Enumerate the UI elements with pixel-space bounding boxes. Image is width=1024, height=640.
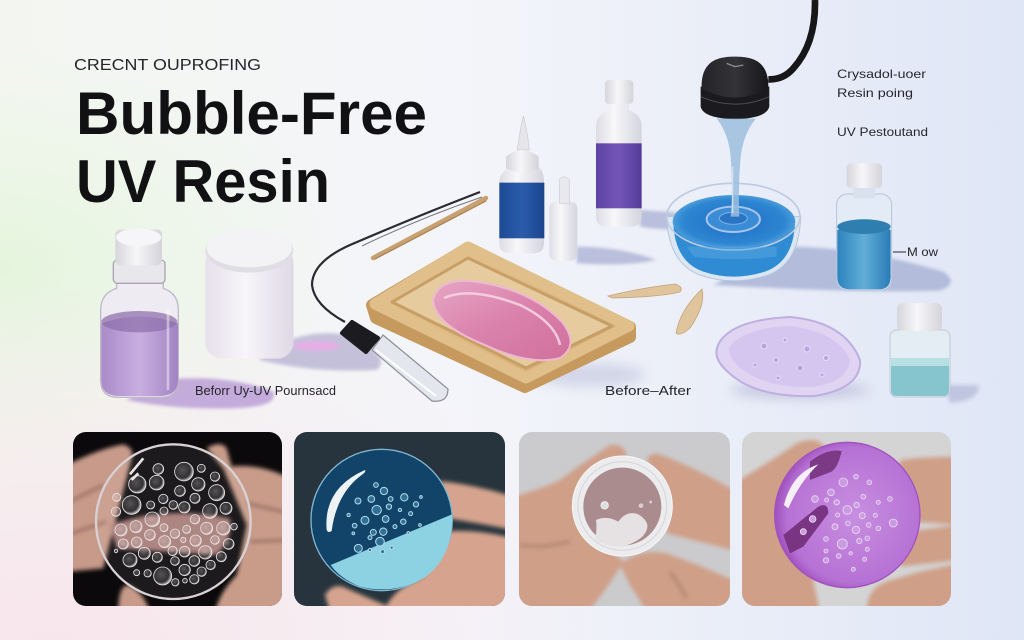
bubbles (347, 483, 422, 554)
icon: purple resin bottle (101, 229, 274, 409)
icon: blue liquid bottle (837, 163, 892, 290)
hands (325, 481, 513, 612)
hands (67, 444, 290, 612)
resin disc (775, 442, 920, 588)
icon: white jar (205, 229, 381, 371)
labels: top right (837, 67, 928, 139)
icon: resin bowl with pour stream (667, 119, 951, 291)
photo: blue resin half cured (294, 432, 513, 612)
label: bottle callout (893, 245, 938, 259)
bubbles (800, 474, 897, 571)
resin disc (311, 449, 452, 591)
icon: black UV lamp with cable (701, 0, 815, 119)
title: UV Resin (76, 148, 330, 215)
icon: blue and white bottles (499, 80, 687, 264)
cup (572, 456, 672, 556)
eyebrow heading: CRECNT OUPROFING (74, 57, 261, 74)
photo: white cup with trapped air (513, 432, 737, 612)
icon: cable and glass tube tool (312, 192, 482, 401)
labels: top right: UV Pestoutand (837, 125, 928, 139)
title: Bubble-Free (76, 80, 427, 147)
panel: wooden tray with pink resin (372, 247, 645, 387)
labels: top right: Resin poing (837, 86, 913, 100)
small white nozzle bottle (549, 177, 577, 261)
purple label bottle (596, 80, 642, 227)
caption: before-after: Before–After (605, 384, 691, 398)
icon: wooden sticks (373, 198, 486, 259)
bubbles (111, 462, 237, 586)
resin disc (96, 444, 251, 599)
label: bottle callout: M ow (907, 245, 938, 259)
pink resin blob (433, 281, 571, 360)
icon: small teal jar (890, 303, 978, 403)
hands (737, 440, 960, 612)
photo: purple resin disc with small bubbles (737, 432, 960, 612)
photo: many bubbles in clear resin (67, 432, 290, 612)
icon: wooden spatulas (608, 284, 703, 334)
hands (513, 445, 737, 612)
icon: clear purple resin disc (716, 317, 870, 398)
labels: top right: Crysadol-uoer (837, 67, 926, 81)
title (76, 80, 427, 215)
caption: before pour: Beforr Uy-UV Pournsacd (195, 384, 336, 398)
blue label dropper bottle (499, 116, 544, 253)
